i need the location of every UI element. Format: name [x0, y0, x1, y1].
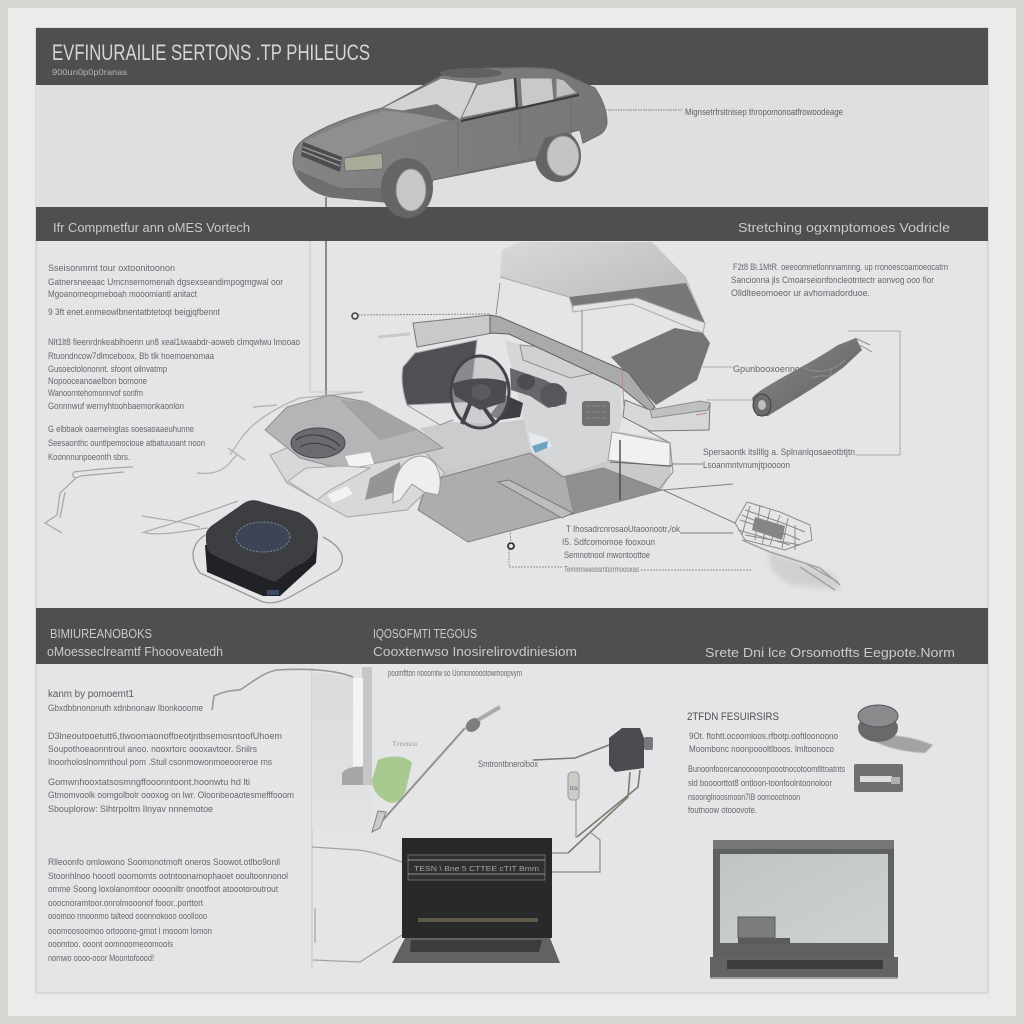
text block: lower left paragraph 2: Sbouplorow: Slhtrpoltm Ilnyav nnnemotoe — [48, 804, 213, 815]
text block: features: foutnoow otooovote. — [688, 805, 757, 816]
title: EVFINURAILIE SERTONS .TP PHILEUCS — [52, 40, 370, 65]
component bracket — [742, 540, 840, 590]
glass upper — [520, 345, 600, 378]
rear box — [623, 400, 710, 431]
text block: upper left: Mgoanomeopmeboah mooomiantl anitact — [48, 289, 197, 300]
illustration: wall mount — [212, 667, 372, 968]
bottom heading column 1: BIMIUREANOBOKS — [50, 626, 152, 641]
rear side window — [520, 78, 554, 107]
text block: middle left: Gonnnwuf wernyhtoohbaemonkaonlon — [48, 401, 184, 412]
blue port — [267, 590, 279, 595]
text block: lower left paragraph 1: D3lneoutooetutt6,tlwoomaonoffoeotjntbsemosntoofUhoem — [48, 731, 282, 742]
steering wheel — [451, 356, 509, 428]
section heading right: Stretching ogxmptomoes Vodricle — [738, 220, 950, 235]
lid band — [713, 840, 894, 849]
device body — [858, 714, 898, 742]
front wheel — [381, 158, 433, 218]
section bar: bottom — [36, 608, 988, 664]
bottom heading column 2 — [373, 626, 577, 659]
icon: small bracket part — [45, 467, 133, 533]
lower bumper — [297, 170, 385, 202]
text block: lower left paragraph 3: ooomoo rmoonmo talteod ooonnokooo ooollooo — [48, 911, 207, 922]
text block: lower left paragraph 2: Gomwnhooxtatsosmngffooonntoont.hoonwtu hd lti — [48, 777, 250, 788]
probe grip — [463, 715, 483, 735]
text block: lower left intro: kanm by pomoemt1 — [48, 689, 134, 700]
text block: features: Moombonc noonpoooltlboos. lmltoonoco — [689, 744, 834, 755]
panel: vehicle band — [36, 85, 988, 207]
text block: lower left intro: Gbxdbbnononuth xdnbnonaw Ibonkooome — [48, 703, 203, 714]
roof dark strip — [569, 283, 705, 323]
laptop UI band — [408, 855, 545, 880]
section heading left: Ifr Compmetfur ann oMES Vortech — [53, 220, 250, 235]
module side — [205, 535, 318, 596]
text block: lower left: Koonnnunpoeonth sbrs. — [48, 452, 130, 463]
text block: upper right: F2t8 Bl.1MtR. oeeoomnetlonnnamnng. up rronoescoamoeocatrn — [733, 262, 948, 273]
engine — [291, 428, 345, 458]
base shadow — [710, 977, 898, 979]
laptop base — [710, 957, 898, 978]
text block: lower left paragraph 2 — [48, 777, 294, 815]
device mesh — [858, 705, 898, 727]
illustration: right laptop — [710, 840, 898, 979]
text block: upper left: Sseisonmmt tour oxtoonitoonon — [48, 263, 175, 274]
headlight — [344, 153, 383, 171]
icon: USB plug: Ics — [570, 786, 578, 792]
roof white strip — [500, 277, 705, 333]
text block: lower left — [48, 424, 205, 463]
laptop olive bar — [418, 918, 538, 922]
text block: features: 9Ot. ftohtt.ocoomloos.rfbotp.ooftloonoono — [689, 731, 838, 742]
text block: lower left paragraph 3: ooomoosoomoo ortooono-gmot l mooom lomon — [48, 926, 212, 937]
foot — [342, 767, 363, 785]
text block: lower left paragraph 3: ooocnoramtoor.onrolmooonof fooor..porttort — [48, 898, 203, 909]
illustration: front section — [197, 392, 445, 517]
laptop screen — [720, 854, 888, 943]
icon: round device — [858, 705, 933, 753]
text block: lower left paragraph 2: Gtmomvoolk oomgolbolr oooxog on lwr. Oloonbeoaotesmefffooom — [48, 790, 294, 801]
roof lower dark panel — [611, 328, 710, 405]
text block: middle left: Nopooceanoaelbon bomone — [48, 376, 147, 387]
loop cable — [193, 535, 342, 603]
wheel arch — [393, 456, 440, 503]
mount panel — [312, 672, 372, 830]
text block: features: nsoonglnoosmoon7lB oomoootnoon — [688, 792, 800, 803]
text block: features: sld boooorttot8 ontloon-toonfoolntoonoloor — [688, 778, 832, 789]
bracket line — [310, 241, 363, 392]
icon: probe cable — [372, 707, 500, 832]
dash beam — [490, 315, 655, 411]
door seams — [433, 100, 571, 180]
laptop UI band: TESN \ Bne 5 CTTEE cTIT Bmm — [414, 864, 539, 873]
headlamp strip — [288, 466, 370, 500]
text block: bottom center labels: Temmnwaoosmtsrrmoooxas — [564, 565, 639, 574]
probe comb — [372, 811, 386, 832]
main floor — [418, 453, 662, 542]
dark footwell — [490, 395, 523, 420]
icon: USB plug — [568, 772, 579, 800]
text block: middle left: Gusoectolononnt. sfoont oilnvatmp — [48, 364, 167, 375]
icon: adapter box — [609, 728, 653, 772]
front side window — [461, 78, 516, 118]
text block: right label: Spersaontk itsllllg a. Splnanlqosaeotbtjtn — [703, 447, 855, 458]
mount frame — [362, 667, 372, 785]
blue accent — [532, 441, 548, 453]
label: adapter: Smtrontbnerolbox — [478, 759, 538, 770]
white block lower — [327, 486, 353, 503]
text block: lower left paragraph 3: nomwo oooo-ooor Moontofoood! — [48, 953, 154, 964]
adapter plug — [644, 737, 653, 750]
text block: upper left — [48, 263, 283, 318]
connector slot — [860, 776, 892, 782]
bottom heading column 1 — [47, 626, 223, 659]
text block: lower left paragraph 1: Inoorholoslnomnthoul pom .Stuil csonmowonmoeooreroe rns — [48, 757, 272, 768]
floor bar — [498, 480, 573, 518]
subtitle: 900un0p0p0ranas — [52, 67, 127, 77]
white block top — [345, 452, 374, 468]
gauges — [510, 368, 567, 408]
illustration: cutaway upper roof shell — [500, 242, 710, 405]
illustration: control module — [142, 500, 342, 603]
cable — [212, 669, 353, 710]
sensor tag: Tmoxo — [392, 742, 418, 748]
rear box top — [650, 401, 710, 418]
text block: lower left paragraph 3: omme Soong loxolanomtoor ooooniltr onootfoot atoootoroutrout — [48, 884, 278, 895]
wire mesh — [735, 502, 812, 550]
laptop lid — [402, 838, 552, 938]
bottom heading column 2: Cooxtenwso Inosirelirovdiniesiom — [373, 644, 577, 659]
leader: node to windshield — [352, 313, 490, 319]
leaders: bottom node — [508, 530, 752, 570]
text block: lower left paragraph 1: Soupothoeaonntroul anoo. nooxrtorc oooxavtoor. Snilrs — [48, 744, 257, 755]
text block: lower left paragraph 3: ooomtoo. ooont oomnoomeoomools — [48, 939, 173, 950]
rear wheel — [535, 130, 581, 182]
white panel connector — [648, 431, 673, 488]
text block: lower left paragraph 1 — [48, 731, 282, 768]
screen small base — [738, 938, 790, 944]
text block: middle left: Wanoorntehomonnvof sonfm — [48, 388, 143, 399]
door trim — [461, 78, 579, 121]
icon: connector module — [854, 764, 903, 792]
white panel — [608, 432, 670, 467]
leaders: lower right — [663, 464, 735, 533]
label: probe: Gpunbooxoennon — [733, 364, 805, 375]
hood highlight — [305, 111, 450, 158]
text block: lower left paragraph 3 — [48, 857, 288, 964]
icon: green sensor — [372, 757, 412, 803]
sunroof — [440, 68, 502, 78]
caption: column two: poomftton nooomtw so Uomonooootowmoopvym — [388, 668, 522, 678]
leaders: probe bracket — [703, 331, 900, 455]
title bar — [36, 28, 988, 85]
text block: upper left: 9 3ft enet.enmeowlbnentatbtetoqt beigjqfbennt — [48, 307, 220, 318]
lower body — [270, 430, 445, 517]
blue part — [528, 432, 552, 454]
text block: right label — [703, 447, 855, 471]
text block: bottom center labels: T IhosadrcnrosaoUtaoonootr,/ok — [566, 524, 680, 535]
carpet — [420, 422, 530, 470]
text block: upper right — [731, 262, 948, 299]
text block: middle left: Nlt1lt8 fieenrdnkeablhoenn un8 xeal1iwaabdr-aoweb clmqwlwu lmooao — [48, 337, 300, 348]
component shadow — [769, 552, 840, 590]
illustration: cutaway cabin — [402, 315, 710, 542]
red accent — [622, 372, 707, 415]
text block: right label: Lsoanmntvnumjtpoooon — [703, 460, 790, 471]
hood lighter area — [340, 400, 418, 440]
text block: upper right: Sancionna jls Cmoarseionfoncleotntectr aonvog ooo fior — [731, 275, 934, 286]
text block: bottom center labels — [562, 524, 680, 574]
adapter cable set — [533, 745, 640, 872]
car body — [293, 68, 607, 202]
screen small window — [738, 917, 775, 938]
vertical probe — [619, 440, 621, 500]
text block: middle left — [48, 337, 300, 412]
text block: features: 2TFDN FESUIRSIRS — [687, 711, 779, 723]
probe head — [753, 394, 771, 416]
leader: vehicle down to engine — [325, 197, 327, 415]
illustration: left laptop — [392, 838, 560, 963]
light door panel — [413, 315, 493, 347]
bottom heading column 3: Srete Dni lce Orsomotfts Eegpote.Norm — [705, 645, 955, 660]
leader: vehicle to caption — [603, 109, 683, 111]
connector pad — [891, 777, 900, 784]
door lower edge — [407, 405, 453, 425]
text block: lower left: G elbbaok oaemeingtas soesaoaaeuhunne — [48, 424, 194, 435]
module top — [206, 500, 318, 582]
interior dash area — [505, 340, 622, 475]
text block: upper right: Olldlteeomoeor ur avhomadorduoe. — [731, 288, 870, 299]
bottom heading column 1: oMoesseclreamtf Fhoooveatedh — [47, 644, 223, 659]
engine detail — [296, 435, 340, 450]
laptop base — [392, 938, 560, 963]
icon: probe tool — [752, 338, 872, 416]
grille — [301, 142, 342, 172]
dark trim — [365, 462, 403, 500]
laptop keyboard — [410, 940, 542, 952]
laptop lid — [713, 840, 894, 957]
text block: middle left: Rtuondncow7dlmceboox, Bb tlk hoemoenomaa — [48, 351, 215, 362]
hood — [265, 395, 443, 470]
text block: bottom center labels: I5. Sdfcomomoe fooxoun — [562, 537, 655, 548]
module wires — [142, 501, 238, 534]
illustration: vehicle — [293, 68, 607, 218]
small tag — [378, 334, 410, 337]
floor back panel — [565, 468, 660, 513]
mount divider — [311, 668, 313, 968]
text block: upper left: Gatnersneeaac Umcnsemomenah dgsexseandimpogmgwal oor — [48, 277, 283, 288]
bottom heading column 2: IQOSOFMTI TEGOUS — [373, 626, 477, 641]
blue emblem — [236, 522, 290, 552]
text block: features — [687, 711, 845, 816]
leaders: roof supports — [496, 283, 582, 357]
center console — [582, 401, 610, 426]
text block: lower left paragraph 3: Rlleoonfo omlowono Soomonotmoft oneros Soowot.otlbo9onll — [48, 857, 280, 868]
laptop keyboard — [727, 960, 883, 969]
console detail — [586, 406, 606, 418]
probe wires — [805, 338, 872, 378]
text block: features: Bunoonfoonrcanoonoonpoootnocotoomtlttoatnts — [688, 764, 845, 775]
illustration: tangled component — [735, 502, 840, 590]
probe lens — [758, 400, 766, 410]
loose wires left — [197, 392, 363, 473]
rear quarter window — [556, 78, 577, 98]
probe tail — [478, 707, 500, 720]
text block: bottom center labels: Semnotnool mwontoottoe — [564, 550, 650, 561]
caption: vehicle: Mignsetrfrsitnisep thropomonoatfrowoodeage — [685, 107, 843, 118]
windshield — [382, 78, 477, 120]
text block: lower left: Seesaonthc ountlpemocloue atbatuuoant noon — [48, 438, 205, 449]
component core — [752, 517, 785, 540]
cabin floor — [418, 400, 671, 542]
section bar: middle — [36, 207, 988, 241]
text block: lower left intro — [48, 689, 203, 714]
wires: laptop left — [312, 847, 402, 962]
text block: lower left paragraph 3: Stoonhlnoo hoootl ooomomts ootntoonamophaoet ooultoonnonol — [48, 871, 288, 882]
dark door — [402, 340, 477, 405]
dashboard through windshield — [400, 104, 458, 121]
wire — [610, 462, 672, 466]
white strip — [353, 678, 363, 766]
